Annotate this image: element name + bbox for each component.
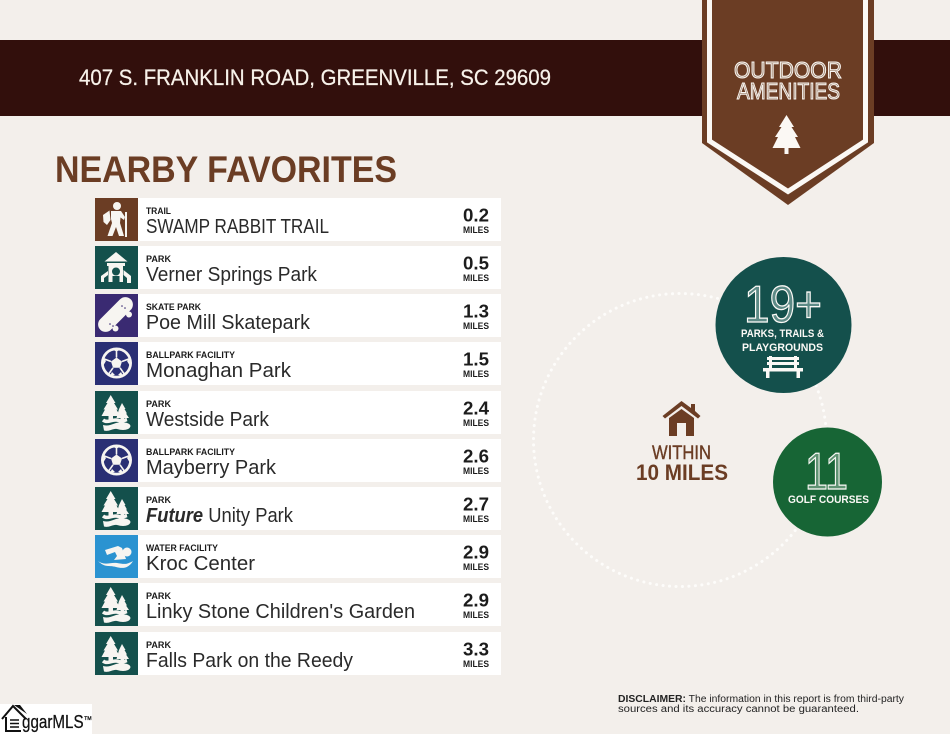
row: Poe Mill Skatepark: SKATE PARK (146, 302, 201, 312)
row: Swamp Rabbit Trail: TRAIL (146, 206, 171, 216)
row: Westside Park: Westside Park (146, 409, 270, 431)
row: Kroc Center: MILES (463, 562, 489, 572)
row: Westside Park (95, 391, 501, 434)
row: Verner Springs Park (95, 246, 501, 289)
icon: ball (95, 439, 138, 482)
row: Linky Stone Children's Garden (95, 583, 501, 626)
list: nearby favorites (95, 198, 501, 675)
row: Future Unity Park: MILES (463, 514, 489, 524)
banner: outdoor amenities (702, 0, 874, 205)
icon: hiker (95, 198, 138, 241)
banner title: OUTDOOR (734, 57, 842, 83)
row: Mayberry Park: BALLPARK FACILITY (146, 447, 235, 457)
row: Future Unity Park: 2.7 (463, 494, 489, 514)
row: Monaghan Park: 1.5 (463, 350, 489, 370)
row: Verner Springs Park: PARK (146, 254, 171, 264)
row: Future Unity Park: Future Unity Park (146, 505, 294, 527)
icon: trees and path (95, 583, 138, 626)
row: Falls Park on the Reedy: 3.3 (463, 640, 489, 660)
icon: swimmer (95, 535, 138, 578)
row: Linky Stone Children's Garden: PARK (146, 591, 171, 601)
row: Monaghan Park: BALLPARK FACILITY (146, 350, 235, 360)
icon: house (662, 401, 700, 436)
row: Poe Mill Skatepark: Poe Mill Skatepark (146, 312, 311, 334)
row: Monaghan Park: Monaghan Park (146, 360, 292, 382)
icon: skateboard (95, 294, 138, 337)
dotted radius ring (534, 294, 826, 586)
row: Westside Park: PARK (146, 399, 171, 409)
row: Linky Stone Children's Garden: MILES (463, 610, 489, 620)
row: Linky Stone Children's Garden: Linky Stone Children's Garden (146, 601, 415, 623)
disclaimer: DISCLAIMER: The information in this report is from third-party (618, 694, 904, 705)
icon: trees and path (95, 391, 138, 434)
stat label: GOLF COURSES (788, 494, 869, 506)
row: Kroc Center (95, 535, 501, 578)
row: Monaghan Park: MILES (463, 369, 489, 379)
icon: pine tree (772, 115, 800, 154)
logo: MLS: ggarMLS (22, 712, 95, 732)
row: Swamp Rabbit Trail: SWAMP RABBIT TRAIL (146, 216, 329, 238)
address heading: 407 S. FRANKLIN ROAD, GREENVILLE, SC 29609 (79, 65, 551, 90)
icon: ball (95, 342, 138, 385)
logo: MLS (0, 704, 92, 734)
row: Mayberry Park: MILES (463, 466, 489, 476)
stat label: PARKS, TRAILS & (741, 328, 824, 340)
stat: parks, trails and playgrounds (716, 257, 852, 393)
header band (0, 40, 950, 116)
row: Falls Park on the Reedy: PARK (146, 640, 171, 650)
row: Poe Mill Skatepark (95, 294, 501, 337)
row: Future Unity Park (95, 487, 501, 530)
disclaimer (618, 694, 904, 715)
row: Falls Park on the Reedy: MILES (463, 659, 489, 669)
row: Mayberry Park: Mayberry Park (146, 457, 277, 479)
within 10 miles (636, 401, 728, 485)
icon: bench (763, 356, 803, 378)
row: Verner Springs Park: Verner Springs Park (146, 264, 318, 286)
disclaimer: sources and its accuracy cannot be guaranteed. (618, 704, 859, 715)
stat label (741, 328, 824, 354)
icon: logo house (2, 705, 27, 731)
row: Falls Park on the Reedy: Falls Park on the Reedy (146, 650, 353, 672)
label (636, 443, 728, 485)
title: NEARBY FAVORITES (55, 149, 397, 190)
row: Falls Park on the Reedy (95, 632, 501, 675)
row: Monaghan Park (95, 342, 501, 385)
logo: MLS: ™ (84, 715, 92, 726)
icon: trees and path (95, 487, 138, 530)
row: Poe Mill Skatepark: 1.3 (463, 302, 489, 322)
row: Poe Mill Skatepark: MILES (463, 321, 489, 331)
banner title (734, 57, 842, 104)
row: Mayberry Park (95, 439, 501, 482)
stat label: PLAYGROUNDS (742, 342, 823, 354)
row: Verner Springs Park: 0.5 (463, 254, 489, 274)
banner title: AMENITIES (737, 78, 840, 104)
row: Swamp Rabbit Trail (95, 198, 501, 241)
row: Verner Springs Park: MILES (463, 273, 489, 283)
stat number 11: 11 (805, 443, 848, 501)
row: Mayberry Park: 2.6 (463, 446, 489, 466)
row: Linky Stone Children's Garden: 2.9 (463, 590, 489, 610)
label: WITHIN (652, 443, 711, 464)
icon: playground (95, 246, 138, 289)
stat number 19+: 19+ (744, 276, 822, 334)
row: Swamp Rabbit Trail: 0.2 (463, 206, 489, 226)
row: Future Unity Park: PARK (146, 495, 171, 505)
row: Kroc Center: 2.9 (463, 542, 489, 562)
row: Kroc Center: WATER FACILITY (146, 543, 218, 553)
row: Swamp Rabbit Trail: MILES (463, 225, 489, 235)
row: Westside Park: MILES (463, 418, 489, 428)
stat: golf courses (773, 428, 882, 536)
row: Kroc Center: Kroc Center (146, 553, 255, 575)
row: Westside Park: 2.4 (463, 398, 489, 418)
label: 10 MILES (636, 460, 728, 485)
icon: trees and path (95, 632, 138, 675)
